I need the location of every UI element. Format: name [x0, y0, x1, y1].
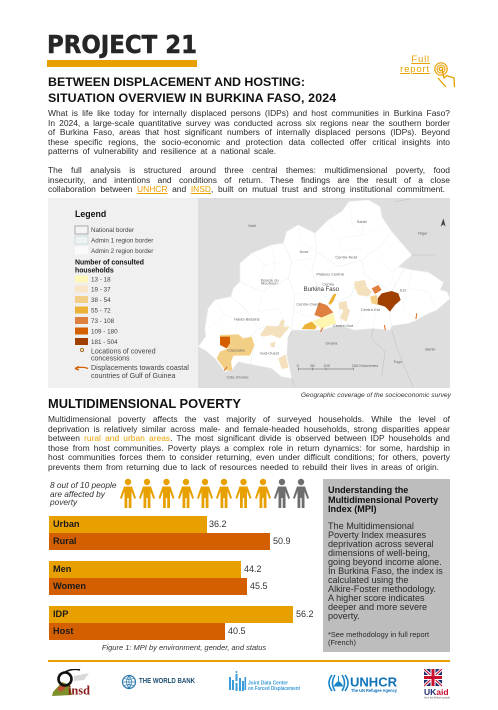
panel: map legend: households — [75, 268, 114, 274]
map: geographic coverage of survey: Centre-Ouest — [296, 301, 321, 306]
bar chart: MPI by environment, gender, status: 36.2 — [209, 519, 227, 529]
panel body text: In Burkina Faso, the index is — [328, 566, 443, 576]
bar chart: MPI by environment, gender, status: Women — [53, 581, 86, 591]
panel: map legend: 55 - 72 — [91, 308, 111, 314]
panel: map legend: 13 - 18 — [91, 276, 111, 284]
panel: map legend: Locations of covered — [91, 348, 156, 356]
icon: pointing hand — [434, 62, 456, 88]
map: geographic coverage of survey: Plateau Central — [316, 272, 344, 277]
panel body text: going beyond income alone. — [328, 557, 442, 567]
text block: poverty description — [48, 414, 450, 472]
Burkina Faso outline — [198, 200, 450, 378]
callout: 8 out of 10 people: are affected by — [50, 489, 105, 499]
callout: 8 out of 10 people — [50, 480, 116, 507]
bar chart: MPI by environment, gender, status — [49, 516, 314, 640]
map: geographic coverage of survey — [198, 198, 450, 388]
logo: Joint Data Center: Joint Data Center — [248, 680, 288, 686]
panel heading: Multidimensional Poverty — [328, 494, 438, 504]
panel heading: Understanding the — [328, 485, 408, 495]
text block: introduction: In 2024, a large-scale quantitative survey was conducted across six regions near the southern border — [48, 118, 450, 128]
panel body text — [328, 521, 443, 621]
bar chart: MPI by environment, gender, status: 44.2 — [244, 564, 262, 574]
panel: map legend: Legend — [75, 209, 106, 219]
logo: UK aid: UKaid — [424, 687, 449, 697]
map caption: Geographic coverage of the socioeconomic survey — [301, 392, 451, 399]
bar chart: MPI by environment, gender, status: IDP — [53, 609, 68, 619]
panel body text: A higher score indicates — [328, 593, 425, 603]
panel body text: calculated using the — [328, 575, 408, 585]
bar chart: MPI by environment, gender, status: 40.5 — [228, 626, 246, 636]
logo: World Bank — [122, 674, 195, 690]
map: geographic coverage of survey: 100 — [323, 363, 331, 368]
panel heading: Index (MPI) — [328, 504, 377, 514]
map: geographic coverage of survey: 50 — [310, 363, 316, 368]
logo: UNHCR — [328, 674, 398, 693]
panel body text: Alkire-Foster methodology. — [328, 584, 436, 594]
title: BETWEEN DISPLACEMENT AND HOSTING: — [48, 75, 305, 89]
map: geographic coverage of survey: Sahel — [357, 219, 367, 224]
link: full report: report — [400, 64, 430, 75]
panel: map legend: 19 - 37 — [91, 286, 111, 294]
panel: map legend: 38 - 54 — [91, 297, 111, 304]
surveyed areas — [217, 334, 254, 371]
map: geographic coverage of survey: Centre-Est — [361, 307, 381, 312]
text block: introduction — [48, 108, 450, 156]
panel footnote: *See methodology in full report — [328, 630, 429, 639]
panel: understanding the MPI — [323, 479, 450, 652]
map: geographic coverage of survey: Sud-Ouest — [260, 351, 280, 356]
text block: poverty description: Multidimensional poverty affects the vast majority of surveyed households. While the level of — [48, 414, 450, 424]
bar chart: MPI by environment, gender, status: Men — [53, 564, 71, 574]
text block: analysis themes: collaboration between UNHCR and INSD, built on mutual trust and strong institutional commitment. — [48, 184, 445, 194]
map: geographic coverage of survey: Nord — [300, 249, 308, 254]
link: full report: Full — [411, 54, 430, 64]
text block: introduction: What is life like today for internally displaced persons (IDPs) and host communities in Burkina Faso? — [48, 108, 450, 118]
bar chart: MPI by environment, gender, status: 45.5 — [250, 581, 268, 591]
text block: analysis themes — [48, 165, 450, 194]
bar chart: MPI by environment, gender, status: Rural — [53, 536, 76, 546]
map: geographic coverage of survey: Ghana — [325, 341, 338, 346]
panel heading — [328, 485, 438, 514]
map: geographic coverage of survey: Mali — [248, 223, 256, 228]
map: geographic coverage of survey: Centre-Sud — [333, 323, 353, 328]
map: geographic coverage of survey: Centre — [322, 282, 335, 287]
text block: poverty description: between rural and urban areas. The most significant divide is observed between IDP households and — [48, 433, 450, 443]
panel: map legend — [48, 198, 198, 388]
panel body text: The Multidimensional — [328, 521, 414, 531]
heading: multidimensional poverty: MULTIDIMENSIONAL POVERTY — [48, 396, 241, 411]
map: geographic coverage of survey: Côte d'Ivoire — [226, 375, 249, 380]
text block: poverty description: those from host communities. Poverty plays a complex role in return dynamics: for some, hardship in — [48, 443, 450, 453]
logo: UNHCR: UNHCR — [350, 674, 398, 690]
panel body text: Poverty Index measures — [328, 530, 426, 540]
chart caption: Figure 1: MPI by environment, gender, and status — [102, 643, 266, 652]
text block: introduction: patterns of vulnerability and resilience at a national scale. — [48, 146, 276, 156]
map: geographic coverage of survey: Centre-Nord — [335, 255, 357, 260]
text block: poverty description: deprivation is relatively similar across male- and female-headed households, strong disparities appear — [48, 424, 450, 434]
panel: map legend: Admin 1 region border — [91, 238, 153, 244]
panel footnote: (French) — [328, 638, 356, 646]
panel: map legend: Number of consulted — [75, 260, 144, 266]
bar chart: MPI by environment, gender, status: 50.9 — [273, 536, 291, 546]
text block: analysis themes: The full analysis is structured around three central themes: multidimensional poverty, food — [48, 165, 450, 175]
title — [48, 75, 336, 105]
text block: poverty description: prevents them from returning due to lack of resources needed to rebuild their lives in areas of origin. — [48, 462, 439, 472]
panel: map legend: 109 - 180 — [91, 328, 118, 336]
panel: map legend: countries of Gulf of Guinea — [91, 372, 175, 380]
logo: INSD — [52, 669, 91, 698]
logo: UK aid — [424, 669, 451, 700]
panel body text: deeper and more severe — [328, 602, 427, 612]
logo: INSD: insd — [68, 682, 91, 698]
logo: Joint Data Center — [229, 671, 300, 692]
map: geographic coverage of survey: Est — [400, 287, 407, 292]
map: geographic coverage of survey: Boucle du — [261, 277, 279, 282]
footer rule — [48, 660, 450, 662]
logo: UK aid: from the British people — [424, 696, 451, 700]
panel footnote — [328, 630, 429, 646]
map: geographic coverage of survey: 200 Kilomètres — [352, 363, 378, 368]
map: geographic coverage of survey: Bénin — [425, 346, 436, 351]
panel: map legend: Admin 2 region border — [91, 248, 153, 255]
text block: analysis themes: insecurity, and intentions and conditions of return. These findings are the result of a close — [48, 175, 450, 185]
icon row: people affected — [120, 478, 309, 508]
text block: introduction: of Burkina Faso, areas that host significant numbers of internally displaced persons (IDPs). Beyond — [48, 127, 450, 137]
panel: map legend: 181 - 504 — [91, 339, 118, 346]
bar chart: MPI by environment, gender, status: Urban — [53, 519, 80, 529]
link: full report — [400, 54, 430, 75]
map: geographic coverage of survey: Niger — [418, 231, 428, 236]
map: geographic coverage of survey: Togo — [393, 359, 403, 364]
map: geographic coverage of survey: Hauts-Bassins — [234, 316, 260, 321]
map: geographic coverage of survey: 0 — [297, 363, 300, 368]
map: geographic coverage of survey: Cascades — [227, 348, 245, 353]
text block: poverty description: host communities forces them to consider returning, even under difficult conditions; for others, poverty — [48, 452, 450, 462]
callout: 8 out of 10 people: poverty — [50, 497, 77, 507]
bar chart: MPI by environment, gender, status: 56.2 — [296, 609, 314, 619]
panel: map legend: Displacements towards coastal — [91, 364, 189, 372]
bar chart: MPI by environment, gender, status: Host — [53, 626, 73, 636]
panel body text: deprivation across several — [328, 539, 434, 549]
panel body text: poverty. — [328, 611, 360, 621]
callout: 8 out of 10 people: 8 out of 10 people — [50, 480, 116, 490]
text block: introduction: these specific regions, the socio-economic and protection data collected offer critical insights into — [48, 137, 450, 147]
panel: map legend: concessions — [91, 356, 130, 362]
panel: map legend: 73 - 108 — [91, 318, 115, 325]
title: SITUATION OVERVIEW IN BURKINA FASO, 2024 — [48, 91, 336, 105]
panel body text: dimensions of well-being, — [328, 548, 430, 558]
map: geographic coverage of survey: Burkina Faso — [304, 287, 340, 293]
map: geographic coverage of survey: Mouhoun — [261, 281, 278, 286]
panel: map legend: National border — [91, 227, 134, 234]
